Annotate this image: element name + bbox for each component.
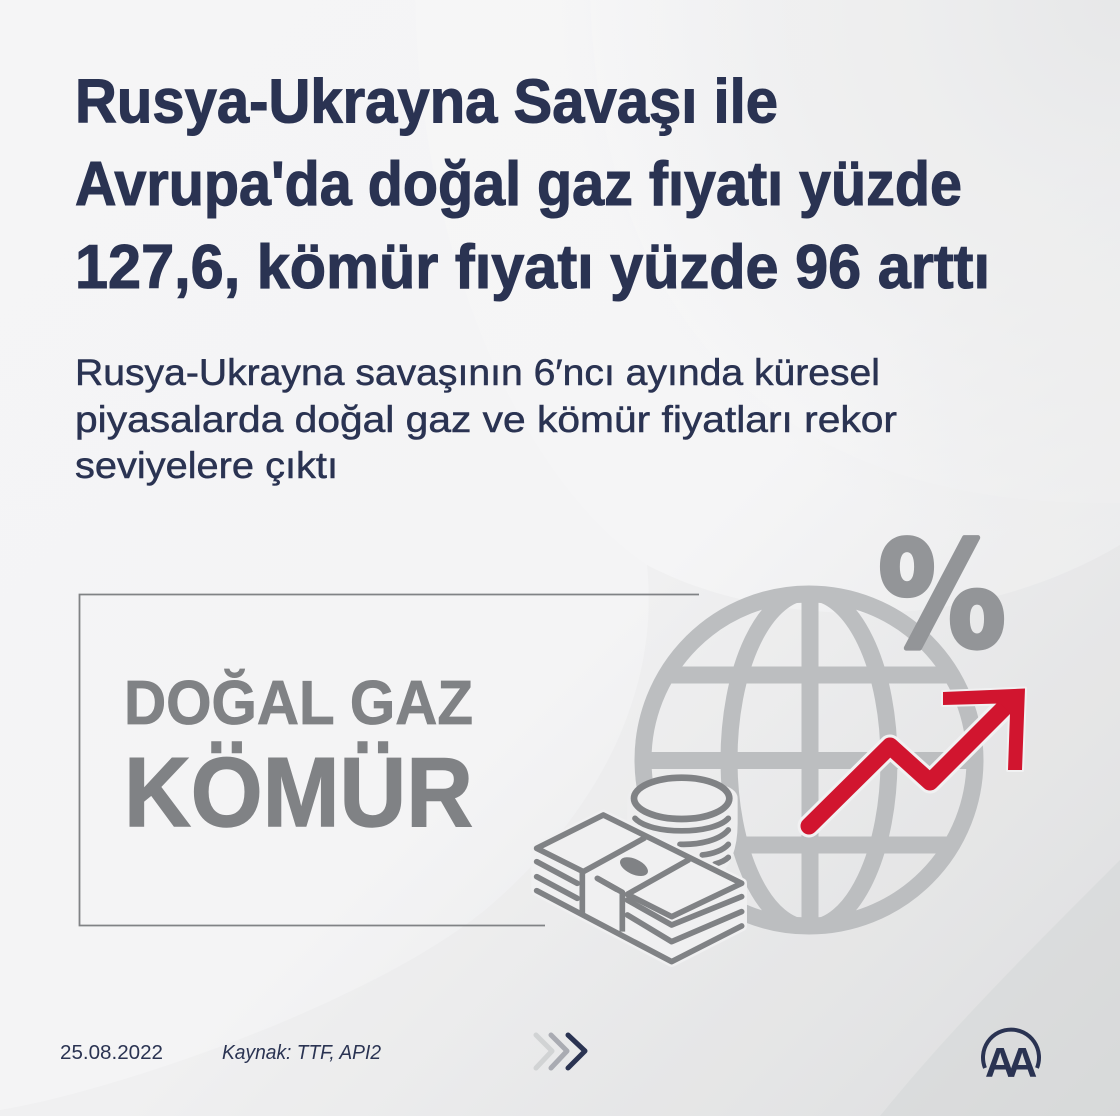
subtitle xyxy=(75,352,897,486)
icon: rising red arrow xyxy=(809,688,1025,826)
source: Kaynak: TTF, API2 xyxy=(222,1042,381,1064)
icon: globe xyxy=(630,586,990,934)
icon: percent sign: % xyxy=(878,511,1006,681)
logo: AA: A xyxy=(985,1039,1015,1086)
icon: money and coins xyxy=(537,778,742,962)
icon: chevrons xyxy=(536,1035,585,1068)
panel: commodity frame xyxy=(80,594,699,926)
subtitle: seviyelere çıktı xyxy=(75,445,338,486)
title: Avrupa'da doğal gaz fıyatı yüzde xyxy=(75,150,962,219)
label: natural gas: DOĞAL GAZ xyxy=(124,669,473,738)
title: 127,6, kömür fıyatı yüzde 96 arttı xyxy=(75,233,990,302)
logo: AA: A xyxy=(1007,1039,1037,1086)
subtitle: piyasalarda doğal gaz ve kömür fiyatları rekor xyxy=(75,399,897,440)
logo: AA xyxy=(983,1030,1039,1086)
coin stack xyxy=(632,778,733,873)
title xyxy=(75,68,990,302)
banknote stack xyxy=(537,815,742,962)
subtitle: Rusya-Ukrayna savaşının 6′ncı ayında küresel xyxy=(75,352,880,393)
label: coal: KÖMÜR xyxy=(124,737,473,847)
title: Rusya-Ukrayna Savaşı ile xyxy=(75,68,778,136)
date: 25.08.2022 xyxy=(60,1042,163,1064)
